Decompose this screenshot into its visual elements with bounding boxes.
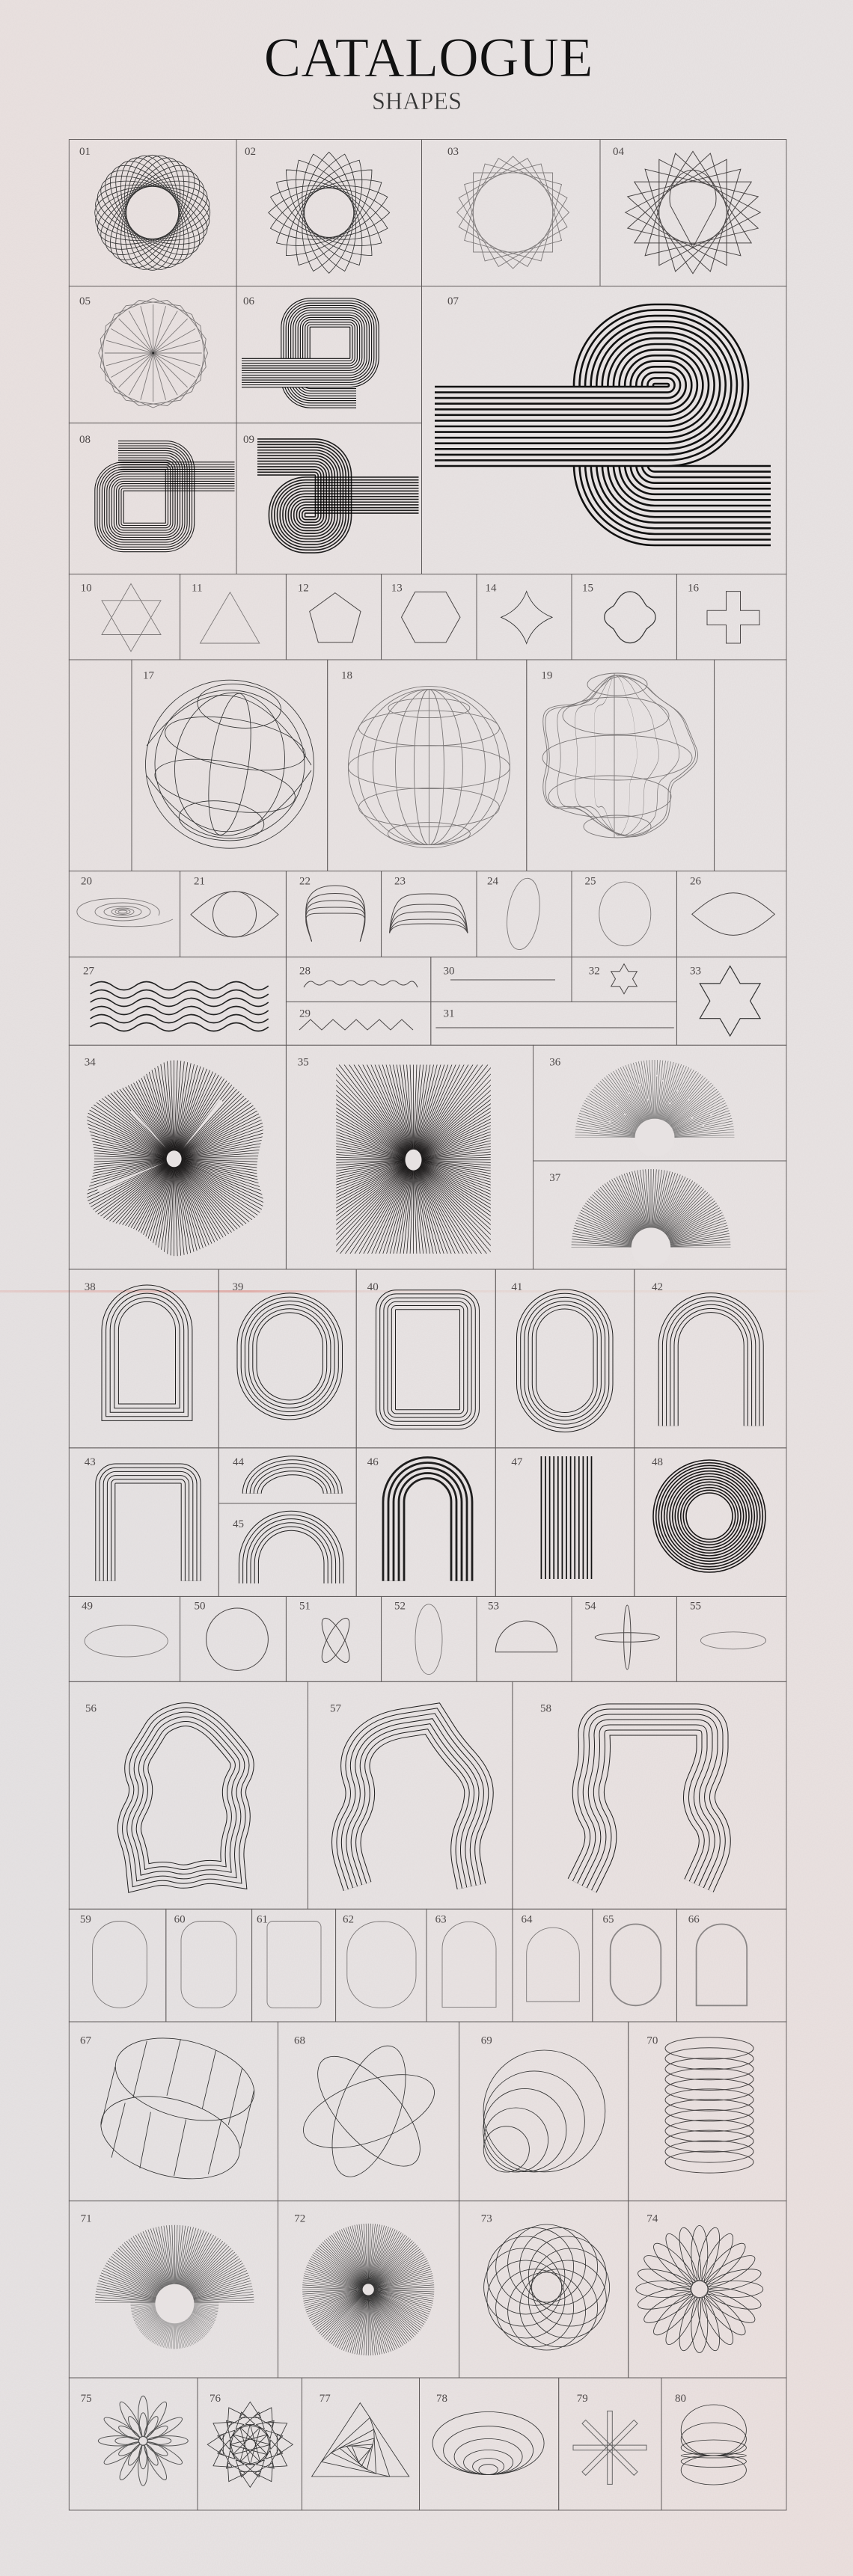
panel 74 — [619, 2201, 786, 2378]
number 27: 27 — [83, 966, 94, 978]
shape 13: hexagon — [401, 592, 460, 643]
shape 39: stadium rings — [247, 1303, 332, 1410]
shape 02: rotated lens spirograph — [253, 137, 405, 289]
number 57: 57 — [330, 1703, 341, 1715]
shape 54: cross ellipses — [595, 1605, 659, 1669]
shape 53: half dome — [495, 1621, 557, 1652]
shape 09: spiral line band — [257, 457, 419, 535]
panel 25 — [572, 871, 676, 957]
panel 33 — [676, 957, 786, 1045]
panel 68 — [278, 2022, 459, 2201]
shape 23: nested domes — [389, 894, 468, 933]
shape 57: wavy arch lines — [346, 1719, 479, 1886]
number 22: 22 — [299, 876, 311, 888]
panel 58 — [513, 1681, 786, 1909]
panel 48 — [635, 1448, 786, 1596]
shape 62: wide stadium outline — [347, 1922, 416, 2008]
number 63: 63 — [435, 1913, 447, 1925]
panel 17 — [132, 660, 328, 871]
shape 14: four-point star — [501, 592, 552, 643]
shape 66: bold arch outline — [697, 1924, 747, 2005]
shape 55: flat ellipse — [700, 1632, 766, 1649]
shape 07: large bold looped band — [435, 344, 771, 506]
panel 37 — [533, 1161, 787, 1270]
panel 05 — [69, 278, 236, 428]
number 11: 11 — [192, 583, 202, 595]
number 04: 04 — [613, 146, 624, 158]
panel 36 — [533, 1044, 787, 1161]
number 76: 76 — [210, 2393, 221, 2405]
panel 29 — [286, 1002, 431, 1045]
shape 33: large star — [700, 966, 760, 1036]
subtitle: SHAPES: SHAPES — [372, 88, 462, 115]
panel 60 — [166, 1909, 252, 2022]
number 35: 35 — [298, 1056, 309, 1068]
shape 22: nested arches — [306, 886, 365, 942]
number 60: 60 — [174, 1913, 186, 1925]
shape 04: triangle star — [604, 145, 760, 293]
number 29: 29 — [299, 1008, 311, 1019]
number 41: 41 — [511, 1281, 522, 1293]
shape 46: bold arch lines — [394, 1468, 462, 1581]
number 06: 06 — [243, 295, 254, 307]
panel 41 — [495, 1269, 635, 1448]
number 02: 02 — [245, 146, 256, 158]
shape 12: pentagon — [310, 593, 361, 643]
shape 28: single wave — [304, 981, 418, 987]
panel 13 — [382, 574, 477, 660]
panel 06 — [236, 286, 422, 423]
number 24: 24 — [487, 876, 498, 888]
number 44: 44 — [233, 1456, 244, 1468]
number 51: 51 — [299, 1600, 311, 1612]
number 66: 66 — [688, 1913, 700, 1925]
number 45: 45 — [233, 1518, 244, 1530]
number 16: 16 — [688, 583, 699, 595]
panel 75 — [69, 2378, 198, 2510]
number 74: 74 — [646, 2212, 658, 2224]
shape 17: tilted wire sphere — [145, 680, 314, 848]
number 47: 47 — [511, 1456, 523, 1468]
number 03: 03 — [447, 146, 459, 158]
number 43: 43 — [85, 1456, 96, 1468]
number 70: 70 — [646, 2035, 658, 2047]
panel 09 — [236, 423, 422, 574]
panel 79 — [559, 2378, 661, 2510]
shape 34: radial burst in blob — [87, 1061, 263, 1257]
panel 59 — [69, 1909, 166, 2022]
shape 20: elliptic spiral — [77, 898, 173, 927]
shape 56: wavy frame rings — [129, 1714, 242, 1878]
number 07: 07 — [447, 295, 459, 307]
panel 50 — [180, 1596, 286, 1681]
shape 61: soft rectangle outline — [267, 1921, 321, 2008]
number 15: 15 — [582, 583, 593, 595]
panel 66 — [676, 1909, 786, 2022]
shape 31: line — [435, 1027, 674, 1028]
panel 14 — [477, 574, 572, 660]
number 67: 67 — [80, 2035, 91, 2047]
shape 43: square arch lines — [106, 1473, 191, 1581]
panel 27 — [69, 957, 286, 1045]
panel 47 — [495, 1448, 635, 1596]
panel 18 — [328, 660, 527, 871]
number 50: 50 — [195, 1600, 205, 1612]
number 25: 25 — [585, 876, 596, 888]
panel 52 — [382, 1596, 477, 1681]
panel 61 — [252, 1909, 336, 2022]
number 78: 78 — [436, 2393, 447, 2405]
shape 16: plus — [707, 592, 759, 643]
shape 06: looped line band — [242, 313, 364, 393]
panel 77 — [302, 2378, 419, 2510]
shape 72: circular burst — [213, 2135, 523, 2444]
shape 21: eye — [191, 892, 278, 937]
shape 44: low arch lines — [252, 1465, 333, 1494]
panel 34 — [69, 1044, 287, 1270]
title: CATALOGUE: CATALOGUE — [264, 27, 593, 89]
number 69: 69 — [481, 2035, 492, 2047]
number 38: 38 — [85, 1281, 96, 1293]
number 71: 71 — [81, 2212, 92, 2224]
number 10: 10 — [81, 583, 92, 595]
panel 04 — [600, 139, 786, 293]
shape 15: quatrefoil — [605, 592, 655, 643]
panel 31 — [431, 1002, 676, 1045]
number 20: 20 — [81, 876, 92, 888]
panel: empty right — [715, 660, 786, 871]
number 72: 72 — [294, 2212, 305, 2224]
panel 12 — [286, 574, 382, 660]
shape 25: ellipse — [599, 882, 651, 946]
shape 64: short arch outline — [527, 1928, 579, 2002]
panel 44 — [218, 1448, 356, 1503]
number 18: 18 — [341, 670, 352, 682]
number 17: 17 — [143, 670, 154, 682]
shape 41: tall stadium rings — [527, 1299, 603, 1423]
shape 24: tilted ellipse — [503, 876, 544, 951]
shape 11: triangle — [201, 592, 260, 643]
number 75: 75 — [81, 2393, 92, 2405]
number 37: 37 — [549, 1172, 561, 1184]
shape 59: stadium outline — [93, 1921, 147, 2008]
panel 80 — [661, 2378, 786, 2510]
number 19: 19 — [541, 670, 552, 682]
panel 26 — [676, 871, 786, 957]
shape 68: atom ellipses — [294, 2037, 444, 2186]
shape 47: vertical bars — [541, 1456, 591, 1579]
shape 80: collapsing ellipses — [681, 2405, 746, 2485]
shape 52: tall ellipse — [415, 1604, 442, 1675]
shape 49: wide ellipse — [85, 1625, 168, 1657]
panel 63 — [426, 1909, 513, 2022]
number 14: 14 — [485, 583, 497, 595]
shape 70: spring coils — [665, 2037, 753, 2173]
number 68: 68 — [294, 2035, 305, 2047]
shape 29: zigzag — [299, 1019, 413, 1030]
number 08: 08 — [79, 434, 91, 446]
shape 77: spiral triangles — [312, 2402, 409, 2477]
shape 78: nested tangent ellipses — [432, 2411, 544, 2475]
number 26: 26 — [690, 876, 702, 888]
number 31: 31 — [443, 1008, 455, 1019]
panel 65 — [593, 1909, 676, 2022]
number 32: 32 — [589, 966, 600, 978]
panel 32 — [572, 957, 676, 1002]
number 64: 64 — [521, 1913, 533, 1925]
panel 16 — [676, 574, 786, 660]
number 46: 46 — [367, 1456, 379, 1468]
panel 40 — [356, 1269, 495, 1448]
shape 03: rotated squares ring — [457, 156, 569, 269]
shape 76: layered star mandala — [204, 2399, 296, 2491]
number 28: 28 — [299, 966, 311, 978]
panel 22 — [286, 871, 382, 957]
panel 10 — [69, 574, 180, 660]
number 42: 42 — [652, 1281, 663, 1293]
shape 08: overlapping line band — [109, 456, 235, 537]
shape 38: closed arch rings — [110, 1293, 184, 1412]
number 56: 56 — [85, 1703, 97, 1715]
shape 51: crossed ellipses — [317, 1615, 355, 1666]
panel 56 — [69, 1681, 308, 1909]
number 61: 61 — [257, 1913, 268, 1925]
number 40: 40 — [367, 1281, 379, 1293]
number 21: 21 — [194, 876, 205, 888]
panel 54 — [572, 1596, 676, 1681]
panel 20 — [69, 871, 180, 957]
shape 73: circle rosette — [450, 2194, 643, 2381]
panel 21 — [180, 871, 286, 957]
panel 02 — [236, 137, 422, 289]
panel 73 — [450, 2194, 643, 2381]
panel 30 — [431, 957, 572, 1002]
panel 15 — [572, 574, 676, 660]
number 39: 39 — [232, 1281, 243, 1293]
panel 57 — [308, 1681, 513, 1909]
shape 50: circle — [207, 1608, 268, 1670]
panel 51 — [286, 1596, 382, 1681]
panel 72 — [213, 2135, 523, 2444]
panel 43 — [69, 1448, 218, 1596]
panel 35 — [286, 1044, 533, 1270]
panel: empty left — [69, 660, 132, 871]
number 73: 73 — [481, 2212, 492, 2224]
panel 28 — [286, 957, 431, 1002]
number 05: 05 — [79, 295, 91, 307]
number 13: 13 — [391, 583, 403, 595]
shape 18: wire sphere — [348, 687, 510, 848]
panel 39 — [218, 1269, 356, 1448]
number 33: 33 — [690, 966, 701, 978]
panel 08 — [69, 423, 236, 574]
panel 24 — [477, 871, 572, 957]
shape 26: leaf — [692, 893, 774, 935]
shape 45: arch lines — [248, 1521, 334, 1583]
panel 55 — [676, 1596, 786, 1681]
panel 11 — [180, 574, 286, 660]
panel 69 — [459, 2022, 629, 2201]
number 80: 80 — [675, 2393, 686, 2405]
shape 19: blob wire sphere — [542, 673, 698, 838]
shape 35: radial burst in rectangle — [336, 1065, 491, 1254]
shape 69: nested tangent circles — [483, 2050, 605, 2172]
number 12: 12 — [298, 583, 309, 595]
panel 67 — [69, 2022, 278, 2201]
number 77: 77 — [320, 2393, 331, 2405]
number 01: 01 — [79, 146, 91, 158]
number 65: 65 — [603, 1913, 614, 1925]
panel 78 — [419, 2378, 559, 2510]
shape 42: open arch lines — [668, 1303, 753, 1426]
panel 45 — [218, 1503, 356, 1596]
panel 42 — [635, 1269, 786, 1448]
number 48: 48 — [652, 1456, 663, 1468]
shape 32: small star — [611, 964, 637, 994]
panel 70 — [629, 2022, 786, 2201]
number 30: 30 — [443, 966, 455, 978]
panel 76 — [198, 2378, 302, 2510]
number 53: 53 — [488, 1600, 499, 1612]
shape 75: flower — [98, 2396, 188, 2485]
panel 49 — [69, 1596, 180, 1681]
number 23: 23 — [394, 876, 406, 888]
panel 62 — [336, 1909, 426, 2022]
shape 10: six-point star — [102, 583, 161, 651]
panel 23 — [382, 871, 477, 957]
panel 71 — [69, 2201, 278, 2379]
shape 27: wave lines — [91, 981, 269, 1031]
number 59: 59 — [80, 1913, 91, 1925]
shape 40: rounded rectangle rings — [386, 1300, 470, 1420]
panel 53 — [477, 1596, 572, 1681]
panel 64 — [513, 1909, 593, 2022]
shape 37: half burst — [572, 1169, 730, 1248]
number 54: 54 — [585, 1600, 596, 1612]
number 58: 58 — [540, 1703, 551, 1715]
shape 74: petal rosette — [619, 2213, 780, 2365]
panel 46 — [356, 1448, 495, 1596]
number 55: 55 — [690, 1600, 701, 1612]
number 79: 79 — [577, 2393, 588, 2405]
number 34: 34 — [85, 1056, 96, 1068]
shape 36: speckled half burst — [575, 1060, 735, 1138]
panel 03 — [422, 139, 600, 286]
number 49: 49 — [82, 1600, 93, 1612]
shape 58: wavy square arch lines — [582, 1720, 715, 1886]
shape 67: tilted cylinder — [92, 2024, 263, 2193]
shape 01: rotated ellipse spirograph — [76, 136, 229, 289]
panel 01 — [69, 136, 236, 289]
number 09: 09 — [243, 434, 254, 446]
shape 71: double half burst — [95, 2224, 254, 2349]
shape 48: concentric ring — [653, 1460, 765, 1572]
shape 65: bold stadium outline — [611, 1924, 661, 2005]
shape 60: rounded outline — [181, 1921, 236, 2008]
panel 19 — [527, 660, 715, 871]
shape 05: spoked wheel — [79, 278, 227, 428]
number 36: 36 — [549, 1056, 561, 1068]
shape 79: eight-spoke asterisk — [573, 2411, 646, 2484]
number 62: 62 — [343, 1913, 354, 1925]
panel 38 — [69, 1269, 218, 1448]
panel 07 — [422, 286, 786, 574]
number 52: 52 — [394, 1600, 406, 1612]
shape 30: line — [450, 979, 555, 981]
shape 63: arch outline — [442, 1922, 496, 2008]
